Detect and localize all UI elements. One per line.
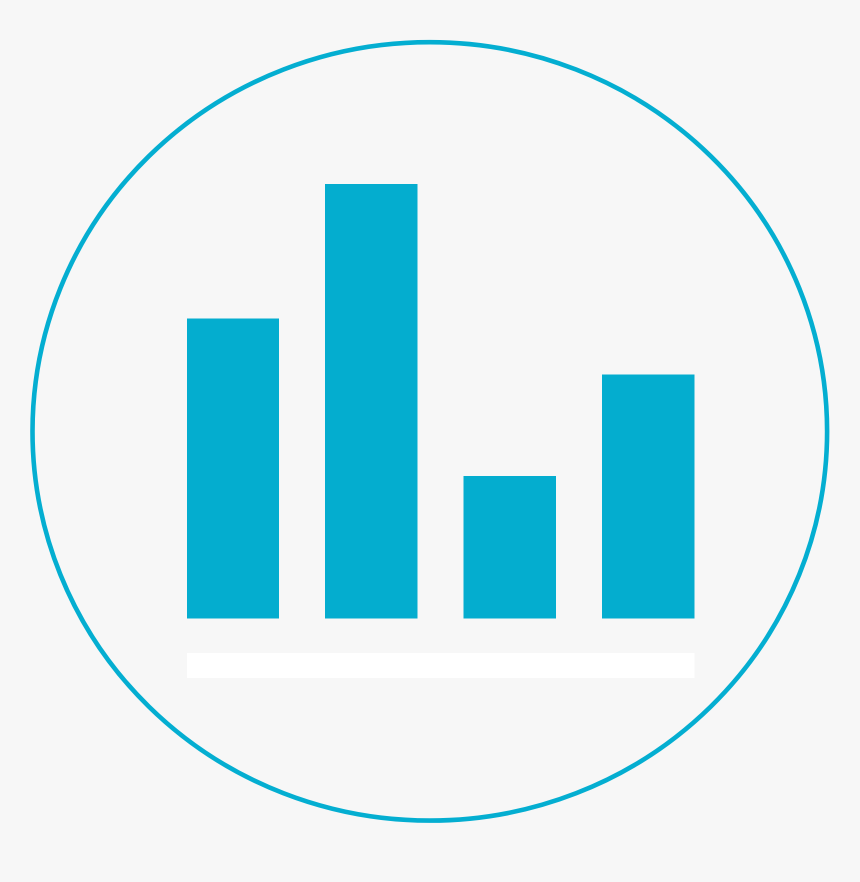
- bar 2: [325, 184, 418, 618]
- bar 4: [602, 374, 694, 618]
- bar 3: [464, 476, 556, 618]
- bar chart: [187, 184, 694, 618]
- chart baseline: [187, 653, 694, 678]
- bar 1: [187, 318, 279, 618]
